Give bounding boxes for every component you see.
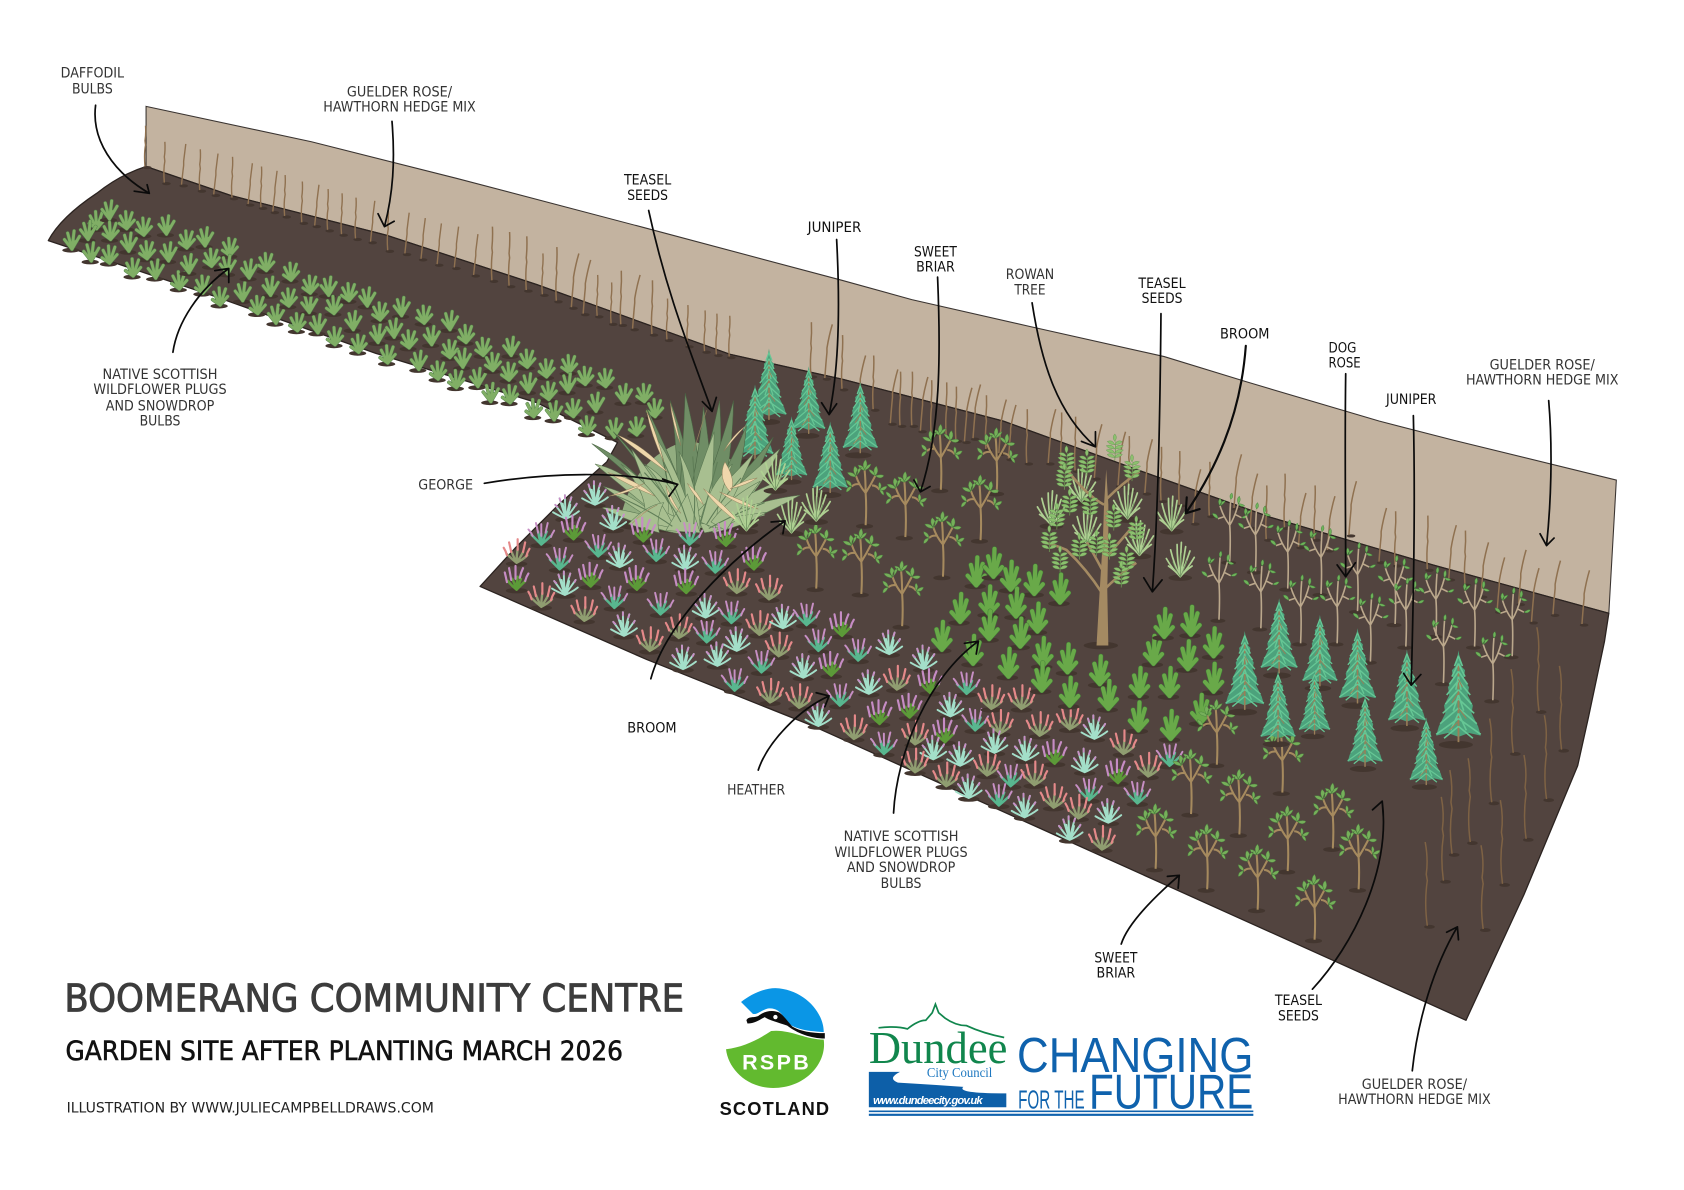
arrow: juniper, right (1404, 416, 1421, 685)
arrow: dog rose (1337, 374, 1355, 577)
label: wildflower plugs, left: AND SNOWDROP (106, 398, 215, 414)
label: sweet briar (914, 245, 957, 276)
logo: RSPB Scotland (720, 988, 829, 1119)
logo: RSPB Scotland: RSPB (742, 1051, 809, 1075)
arrow: wildflower plugs, left (173, 269, 229, 352)
label: daffodil bulbs (61, 65, 124, 97)
label: wildflower plugs, left: NATIVE SCOTTISH (103, 367, 217, 383)
logo: Changing for the Future (869, 1028, 1253, 1119)
label: heather: HEATHER (727, 783, 785, 799)
label: wildflower plugs, centre: BULBS (881, 876, 921, 892)
label: teasel seeds: TEASEL (623, 173, 671, 189)
label: wildflower plugs, centre: NATIVE SCOTTISH (844, 829, 959, 845)
plants: sweet briar saplings (797, 424, 1380, 943)
plants: broom bushes (732, 455, 1194, 581)
logo: Dundee City Council: Dundee (869, 1023, 1007, 1073)
label: juniper, right: JUNIPER (1385, 392, 1437, 408)
label: sweet briar, lower: BRIAR (1097, 965, 1135, 981)
arrow: sweet briar (914, 277, 939, 492)
label: teasel seeds, centre: TEASEL (1137, 276, 1186, 292)
label: teasel seeds, lower: SEEDS (1278, 1008, 1319, 1024)
label: dog rose: DOG (1329, 340, 1356, 356)
arrow: broom, lower (651, 521, 785, 679)
plants: green native wildflower plugs in the middle field (930, 549, 1223, 743)
arrow: teasel seeds, lower (1312, 801, 1383, 989)
label: sweet briar: SWEET (914, 245, 957, 261)
label: juniper: JUNIPER (807, 220, 862, 236)
label: sweet briar: BRIAR (916, 260, 955, 276)
label: guelder rose hedge, upper left: HAWTHORN HEDGE MIX (323, 100, 476, 116)
arrow: broom, upper right (1186, 346, 1246, 513)
wall: tan boundary fence backdrop (146, 106, 1616, 613)
label: teasel seeds, centre (1137, 276, 1186, 307)
label: guelder rose hedge, lower: HAWTHORN HEDGE MIX (1338, 1092, 1491, 1108)
arrow: guelder rose hedge, upper left (378, 121, 394, 227)
logo: Changing for the Future: FOR THE (1018, 1086, 1085, 1114)
arrow: daffodil bulbs (95, 105, 149, 193)
plants: heather mix (504, 481, 1182, 853)
arrow: heather (758, 693, 829, 770)
label: guelder rose hedge, lower (1338, 1077, 1491, 1108)
logo: Dundee City Council: www.dundeecity.gov.uk (873, 1095, 983, 1107)
hedge twigs: guelder rose and hawthorn along the wall (143, 126, 1589, 627)
label: dog rose: ROSE (1329, 355, 1361, 371)
arrow: teasel seeds (649, 211, 716, 411)
label: wildflower plugs, left: WILDFLOWER PLUGS (93, 382, 227, 398)
label: guelder rose hedge, upper right (1466, 357, 1619, 388)
arrow: juniper (822, 240, 839, 415)
label: broom, lower: BROOM (627, 720, 677, 736)
arrow: teasel seeds, centre (1144, 314, 1162, 592)
label: wildflower plugs, centre: AND SNOWDROP (847, 860, 956, 876)
label: daffodil bulbs: BULBS (72, 81, 113, 97)
label: wildflower plugs, left: BULBS (140, 413, 180, 429)
label: teasel seeds (623, 173, 671, 204)
plant: rowan tree (1041, 434, 1145, 649)
label: wildflower plugs, centre: WILDFLOWER PLUGS (834, 845, 968, 861)
arrow: George (484, 475, 678, 496)
arrow: sweet briar, lower (1121, 875, 1179, 944)
label: rowan tree: TREE (1013, 282, 1046, 298)
logo: Dundee City Council (869, 1004, 1007, 1107)
plants: dog rose saplings (1202, 493, 1530, 703)
label: daffodil bulbs: DAFFODIL (61, 65, 124, 81)
arrow: wildflower plugs, centre (894, 641, 978, 813)
logo: RSPB Scotland: SCOTLAND (720, 1098, 829, 1119)
plants: junipers in the right-hand field (1226, 598, 1481, 790)
logo: Changing for the Future: FUTURE (1089, 1064, 1253, 1119)
label: guelder rose hedge, lower: GUELDER ROSE/ (1362, 1077, 1468, 1093)
arrow: rowan tree (1032, 303, 1095, 447)
arrow: guelder rose hedge, upper right (1540, 401, 1554, 546)
label: wildflower plugs, centre (834, 829, 968, 892)
logo: Changing for the Future: CHANGING (1017, 1028, 1253, 1083)
title: BOOMERANG COMMUNITY CENTRE (64, 977, 684, 1022)
label: teasel seeds, lower: TEASEL (1274, 993, 1322, 1009)
plants: junipers near George (737, 349, 878, 498)
label: dog rose (1329, 340, 1361, 371)
label: rowan tree (1006, 267, 1054, 298)
label: teasel seeds, centre: SEEDS (1142, 291, 1182, 307)
logo: Dundee City Council: City Council (927, 1066, 992, 1081)
arrow: guelder rose hedge, lower (1412, 927, 1458, 1071)
label: sweet briar, lower: SWEET (1094, 950, 1138, 966)
illustrator credit: ILLUSTRATION BY WWW.JULIECAMPBELLDRAWS.COM (67, 1101, 434, 1117)
plant: George, large ornamental grass clump (592, 393, 800, 534)
subtitle: GARDEN SITE AFTER PLANTING MARCH 2026 (66, 1036, 623, 1067)
label: teasel seeds: SEEDS (627, 188, 668, 204)
label: broom, upper right: BROOM (1220, 326, 1269, 342)
label: teasel seeds, lower (1274, 993, 1322, 1024)
label: George: GEORGE (418, 478, 473, 494)
label: guelder rose hedge, upper left (323, 85, 476, 116)
label: guelder rose hedge, upper left: GUELDER ROSE/ (347, 85, 453, 101)
label: sweet briar, lower (1094, 950, 1138, 981)
label: guelder rose hedge, upper right: HAWTHORN HEDGE MIX (1466, 372, 1619, 388)
label: wildflower plugs, left (93, 367, 227, 429)
soil: boomerang-shaped dark planting bed (48, 166, 1609, 1020)
plants: native wildflower plugs and snowdrop bulbs on the left strip (62, 201, 663, 441)
label: guelder rose hedge, upper right: GUELDER ROSE/ (1490, 357, 1596, 373)
label: rowan tree: ROWAN (1006, 267, 1054, 283)
hedge twigs: tall guelder rose and hawthorn on the right end (1424, 627, 1569, 932)
